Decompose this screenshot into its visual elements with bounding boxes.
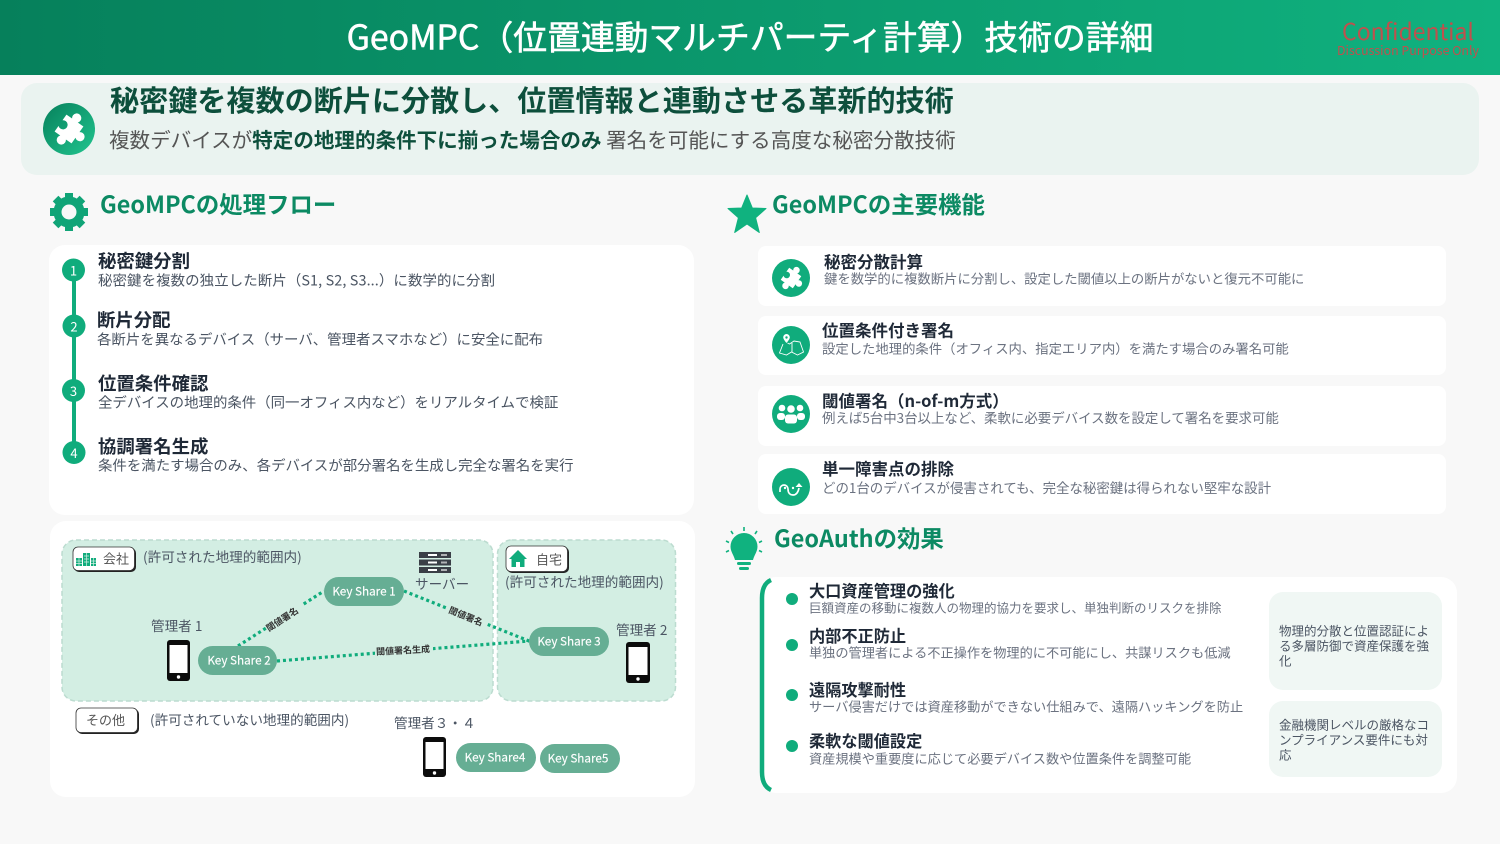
icon: star bbox=[728, 195, 766, 232]
callout: defense in depth: 化 bbox=[1279, 650, 1292, 670]
key share 2 bbox=[198, 646, 277, 675]
effect 1: 巨額資産の移動に複数人の物理的協力を要求し、単独判断のリスクを排除 bbox=[809, 598, 1222, 616]
feature card: no single point of failure: どの1台のデバイスが侵害されても、完全な秘密鍵は得られない堅牢な設計 bbox=[822, 477, 1272, 497]
icon: puzzle bbox=[43, 103, 95, 155]
key share 4: Key Share4 bbox=[465, 748, 526, 766]
feature card: location-conditioned signature: 設定した地理的条件（オフィス内、指定エリア内）を満たす場合のみ署名可能 bbox=[822, 338, 1289, 358]
key share 5: Key Share5 bbox=[548, 750, 608, 766]
icon: map bbox=[772, 326, 810, 364]
effect 4: 柔軟な閾値設定 bbox=[809, 728, 922, 752]
heading text: GeoMPCの処理フロー bbox=[100, 186, 336, 220]
icon: route bbox=[772, 468, 810, 506]
key share 4 bbox=[456, 743, 536, 772]
label: home bbox=[506, 546, 569, 573]
label: other: その他 bbox=[86, 710, 125, 729]
effect 1 bbox=[786, 578, 1222, 616]
step 3 bbox=[62, 370, 558, 412]
feature card: secret sharing: 鍵を数学的に複数断片に分割し、設定した閾値以上の断片がないと復元不可能に bbox=[824, 268, 1304, 288]
step 4: 協調署名生成 bbox=[98, 433, 208, 459]
panel: location diagram bbox=[50, 521, 695, 797]
section heading: features bbox=[728, 186, 985, 232]
callout: compliance bbox=[1269, 701, 1442, 777]
other scope text: (許可されていない地理的範囲内) bbox=[150, 709, 349, 729]
feature card: location-conditioned signature: 位置条件付き署名 bbox=[822, 318, 954, 342]
connector: threshold signature links bbox=[238, 591, 529, 661]
effect 2: 内部不正防止 bbox=[809, 623, 906, 647]
step 3: 位置条件確認 bbox=[98, 370, 209, 396]
icon: house bbox=[509, 550, 527, 567]
office scope text: (許可された地理的範囲内) bbox=[143, 546, 302, 566]
key share 5 bbox=[540, 744, 620, 773]
panel: effects bbox=[760, 577, 1457, 793]
label: home: 自宅 bbox=[536, 550, 562, 568]
confidential mark: Discussion Purpose Only bbox=[1337, 41, 1480, 59]
timeline line bbox=[72, 270, 76, 452]
feature card: threshold signature bbox=[758, 386, 1446, 446]
panel: process flow bbox=[49, 245, 694, 515]
step 1: 1 bbox=[70, 260, 77, 280]
effect 3: 遠隔攻撃耐性 bbox=[809, 677, 906, 701]
label: office bbox=[73, 547, 136, 572]
admins 3 and 4 bbox=[394, 712, 476, 777]
step 3: 全デバイスの地理的条件（同一オフィス内など）をリアルタイムで検証 bbox=[98, 392, 558, 412]
label: other bbox=[76, 708, 139, 734]
icon: server bbox=[419, 552, 451, 573]
admins 3 and 4: 管理者３・４ bbox=[394, 712, 476, 732]
effect 1: 大口資産管理の強化 bbox=[809, 578, 955, 602]
confidential mark bbox=[1337, 13, 1480, 59]
callout: defense in depth: 物理的分散と位置認証によ bbox=[1279, 620, 1429, 640]
callout: defense in depth bbox=[1269, 592, 1442, 690]
feature card: no single point of failure bbox=[758, 454, 1446, 514]
callout: compliance: ンプライアンス要件にも対 bbox=[1279, 730, 1428, 748]
banner bbox=[21, 78, 1479, 175]
effect 2: 単独の管理者による不正操作を物理的に不可能にし、共謀リスクも低減 bbox=[809, 642, 1231, 662]
feature card: no single point of failure: 単一障害点の排除 bbox=[822, 456, 954, 480]
feature card: location-conditioned signature bbox=[758, 316, 1446, 375]
step 3: 3 bbox=[70, 381, 77, 400]
connector: threshold signature links: 閾値署名 bbox=[447, 603, 485, 629]
effect 3 bbox=[786, 677, 1243, 716]
zone: home bbox=[498, 540, 676, 701]
label: office: 会社 bbox=[103, 548, 129, 568]
heading text: GeoMPCの主要機能 bbox=[772, 186, 985, 220]
home scope text: (許可された地理的範囲内) bbox=[505, 571, 664, 591]
section heading: effects bbox=[726, 520, 944, 570]
effect 4: 資産規模や重要度に応じて必要デバイス数や位置条件を調整可能 bbox=[809, 748, 1191, 768]
step 1 bbox=[62, 248, 495, 290]
banner headline: 秘密鍵を複数の断片に分散し、位置情報と連動させる革新的技術 bbox=[110, 78, 954, 120]
section heading: flow bbox=[50, 186, 336, 231]
key share 2: Key Share 2 bbox=[207, 652, 271, 668]
label: server: サーバー bbox=[415, 573, 469, 593]
step 1: 秘密鍵を複数の独立した断片（S1, S2, S3...）に数学的に分割 bbox=[98, 270, 495, 290]
icon: people bbox=[772, 395, 810, 433]
step 2: 断片分配 bbox=[97, 306, 171, 332]
admin 2: 管理者 2 bbox=[616, 619, 667, 639]
key share 3 bbox=[529, 627, 609, 656]
step 4 bbox=[62, 433, 574, 476]
effect 4 bbox=[786, 728, 1191, 768]
step 2 bbox=[62, 306, 543, 350]
header bar bbox=[0, 0, 1500, 75]
key share 3: Key Share 3 bbox=[537, 632, 601, 650]
step 2: 各断片を異なるデバイス（サーバ、管理者スマホなど）に安全に配布 bbox=[97, 328, 543, 350]
connector: threshold signature links: 閾値署名 bbox=[263, 604, 301, 634]
accent border bbox=[762, 580, 771, 790]
icon: puzzle bbox=[772, 259, 810, 297]
icon: light bulb bbox=[726, 527, 762, 570]
feature card: secret sharing: 秘密分散計算 bbox=[824, 249, 923, 273]
feature card: threshold signature: 閾値署名（n-of-m方式） bbox=[822, 388, 1009, 412]
callout: compliance: 応 bbox=[1279, 744, 1292, 764]
effect 3: サーバ侵害だけでは資産移動ができない仕組みで、遠隔ハッキングを防止 bbox=[809, 696, 1243, 716]
confidential mark: Confidential bbox=[1342, 13, 1474, 47]
icon: building bbox=[76, 553, 96, 566]
zone: office bbox=[62, 540, 493, 701]
step 4: 4 bbox=[70, 443, 78, 462]
icon: gear bbox=[50, 193, 88, 231]
admin 2 bbox=[616, 619, 667, 683]
title: GeoMPC（位置連動マルチパーティ計算）技術の詳細 bbox=[347, 10, 1153, 60]
step 2: 2 bbox=[70, 316, 78, 336]
callout: compliance: 金融機関レベルの厳格なコ bbox=[1279, 714, 1429, 734]
feature card: threshold signature: 例えば5台中3台以上など、柔軟に必要デバイス数を設定して署名を要求可能 bbox=[822, 407, 1279, 427]
key share 1: Key Share 1 bbox=[332, 582, 396, 600]
step 4: 条件を満たす場合のみ、各デバイスが部分署名を生成し完全な署名を実行 bbox=[98, 454, 574, 476]
feature card: secret sharing bbox=[758, 246, 1446, 306]
connector: threshold signature links: 閾値署名生成 bbox=[376, 642, 430, 658]
effect 2 bbox=[786, 623, 1231, 662]
admin 1 bbox=[151, 615, 202, 681]
banner subtext: 複数デバイスが特定の地理的条件下に揃った場合のみ 署名を可能にする高度な秘密分散技術 bbox=[109, 124, 956, 154]
step 1: 秘密鍵分割 bbox=[98, 248, 190, 274]
heading text: GeoAuthの効果 bbox=[774, 520, 944, 554]
admin 1: 管理者 1 bbox=[151, 615, 202, 635]
callout: defense in depth: る多層防御で資産保護を強 bbox=[1279, 636, 1430, 654]
key share 1 bbox=[324, 577, 404, 606]
